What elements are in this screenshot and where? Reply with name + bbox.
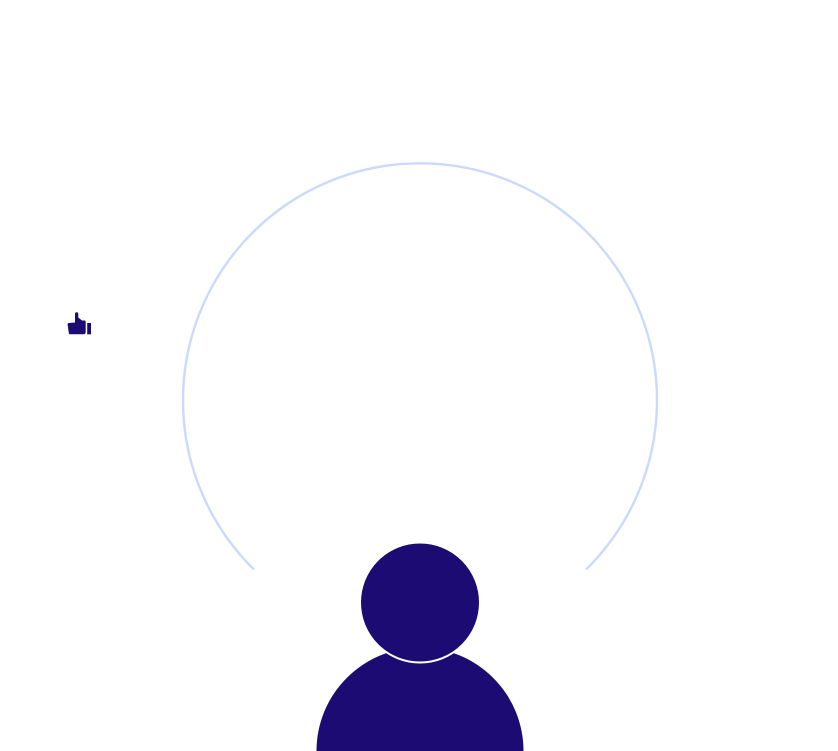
person head [360, 542, 480, 662]
icon: thumbs up [68, 312, 91, 334]
person body [316, 648, 524, 751]
arc ring [183, 163, 657, 570]
icon: person [316, 542, 524, 751]
